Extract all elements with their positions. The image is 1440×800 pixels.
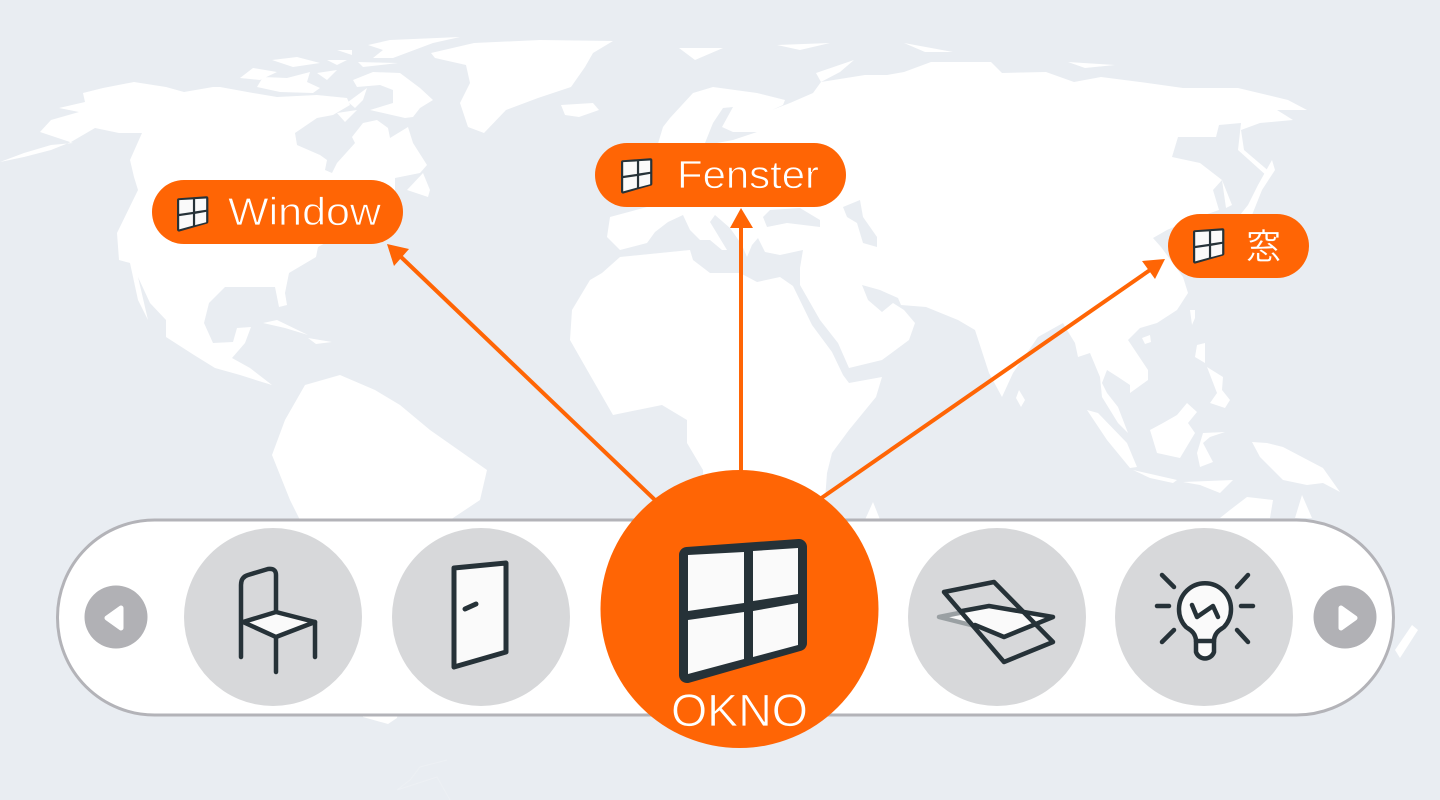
icon: window	[623, 160, 650, 192]
item: chair	[184, 528, 362, 706]
sea: Caspian	[843, 200, 877, 247]
map: Southeast Asia and Japan	[1087, 160, 1340, 493]
icon: chair	[241, 569, 315, 672]
arrow: to Japanese label	[820, 259, 1165, 499]
pill	[595, 143, 846, 207]
text: Window: Window	[228, 191, 382, 234]
icon: window	[1195, 230, 1222, 262]
arrow: to Fenster	[730, 208, 753, 475]
item: selected window	[600, 470, 878, 748]
map: Africa	[570, 250, 882, 620]
label: Window	[152, 180, 403, 244]
pill	[152, 180, 403, 244]
map: Caribbean, Madagascar, Australia, New Zealand	[263, 320, 1418, 658]
sea: Black Sea	[763, 208, 820, 227]
sea: Baltic	[705, 107, 757, 143]
icon: window	[179, 198, 206, 230]
map: North America	[0, 82, 427, 385]
text: Japanese word for window: 窓	[1246, 228, 1281, 267]
text: Fenster: Fenster	[677, 154, 819, 197]
map: Eurasia	[607, 62, 1307, 433]
carousel band	[58, 520, 1394, 715]
arrow: to Window	[387, 244, 655, 500]
icon: tilted pane	[939, 582, 1053, 662]
map: northern islands of Eurasia	[679, 43, 1232, 407]
label: Fenster	[595, 143, 846, 207]
item: door	[392, 528, 570, 706]
map: Iceland	[561, 103, 599, 117]
label: Japanese	[1168, 214, 1309, 278]
icon: light bulb	[1157, 575, 1253, 658]
text: OKNO: OKNO	[671, 685, 808, 736]
item: opened window	[908, 528, 1086, 706]
map: Antarctic outline	[397, 760, 450, 800]
map: Arctic islands	[240, 37, 460, 122]
pill	[1168, 214, 1309, 278]
icon: large window	[687, 547, 799, 675]
icon: door	[454, 563, 506, 667]
item: light bulb	[1115, 528, 1293, 706]
map: inland seas	[705, 107, 877, 247]
map: South America	[272, 375, 487, 724]
button: previous	[84, 586, 148, 648]
map: Newfoundland	[407, 173, 430, 197]
map: Greenland	[431, 40, 613, 133]
button: next	[1314, 586, 1376, 648]
